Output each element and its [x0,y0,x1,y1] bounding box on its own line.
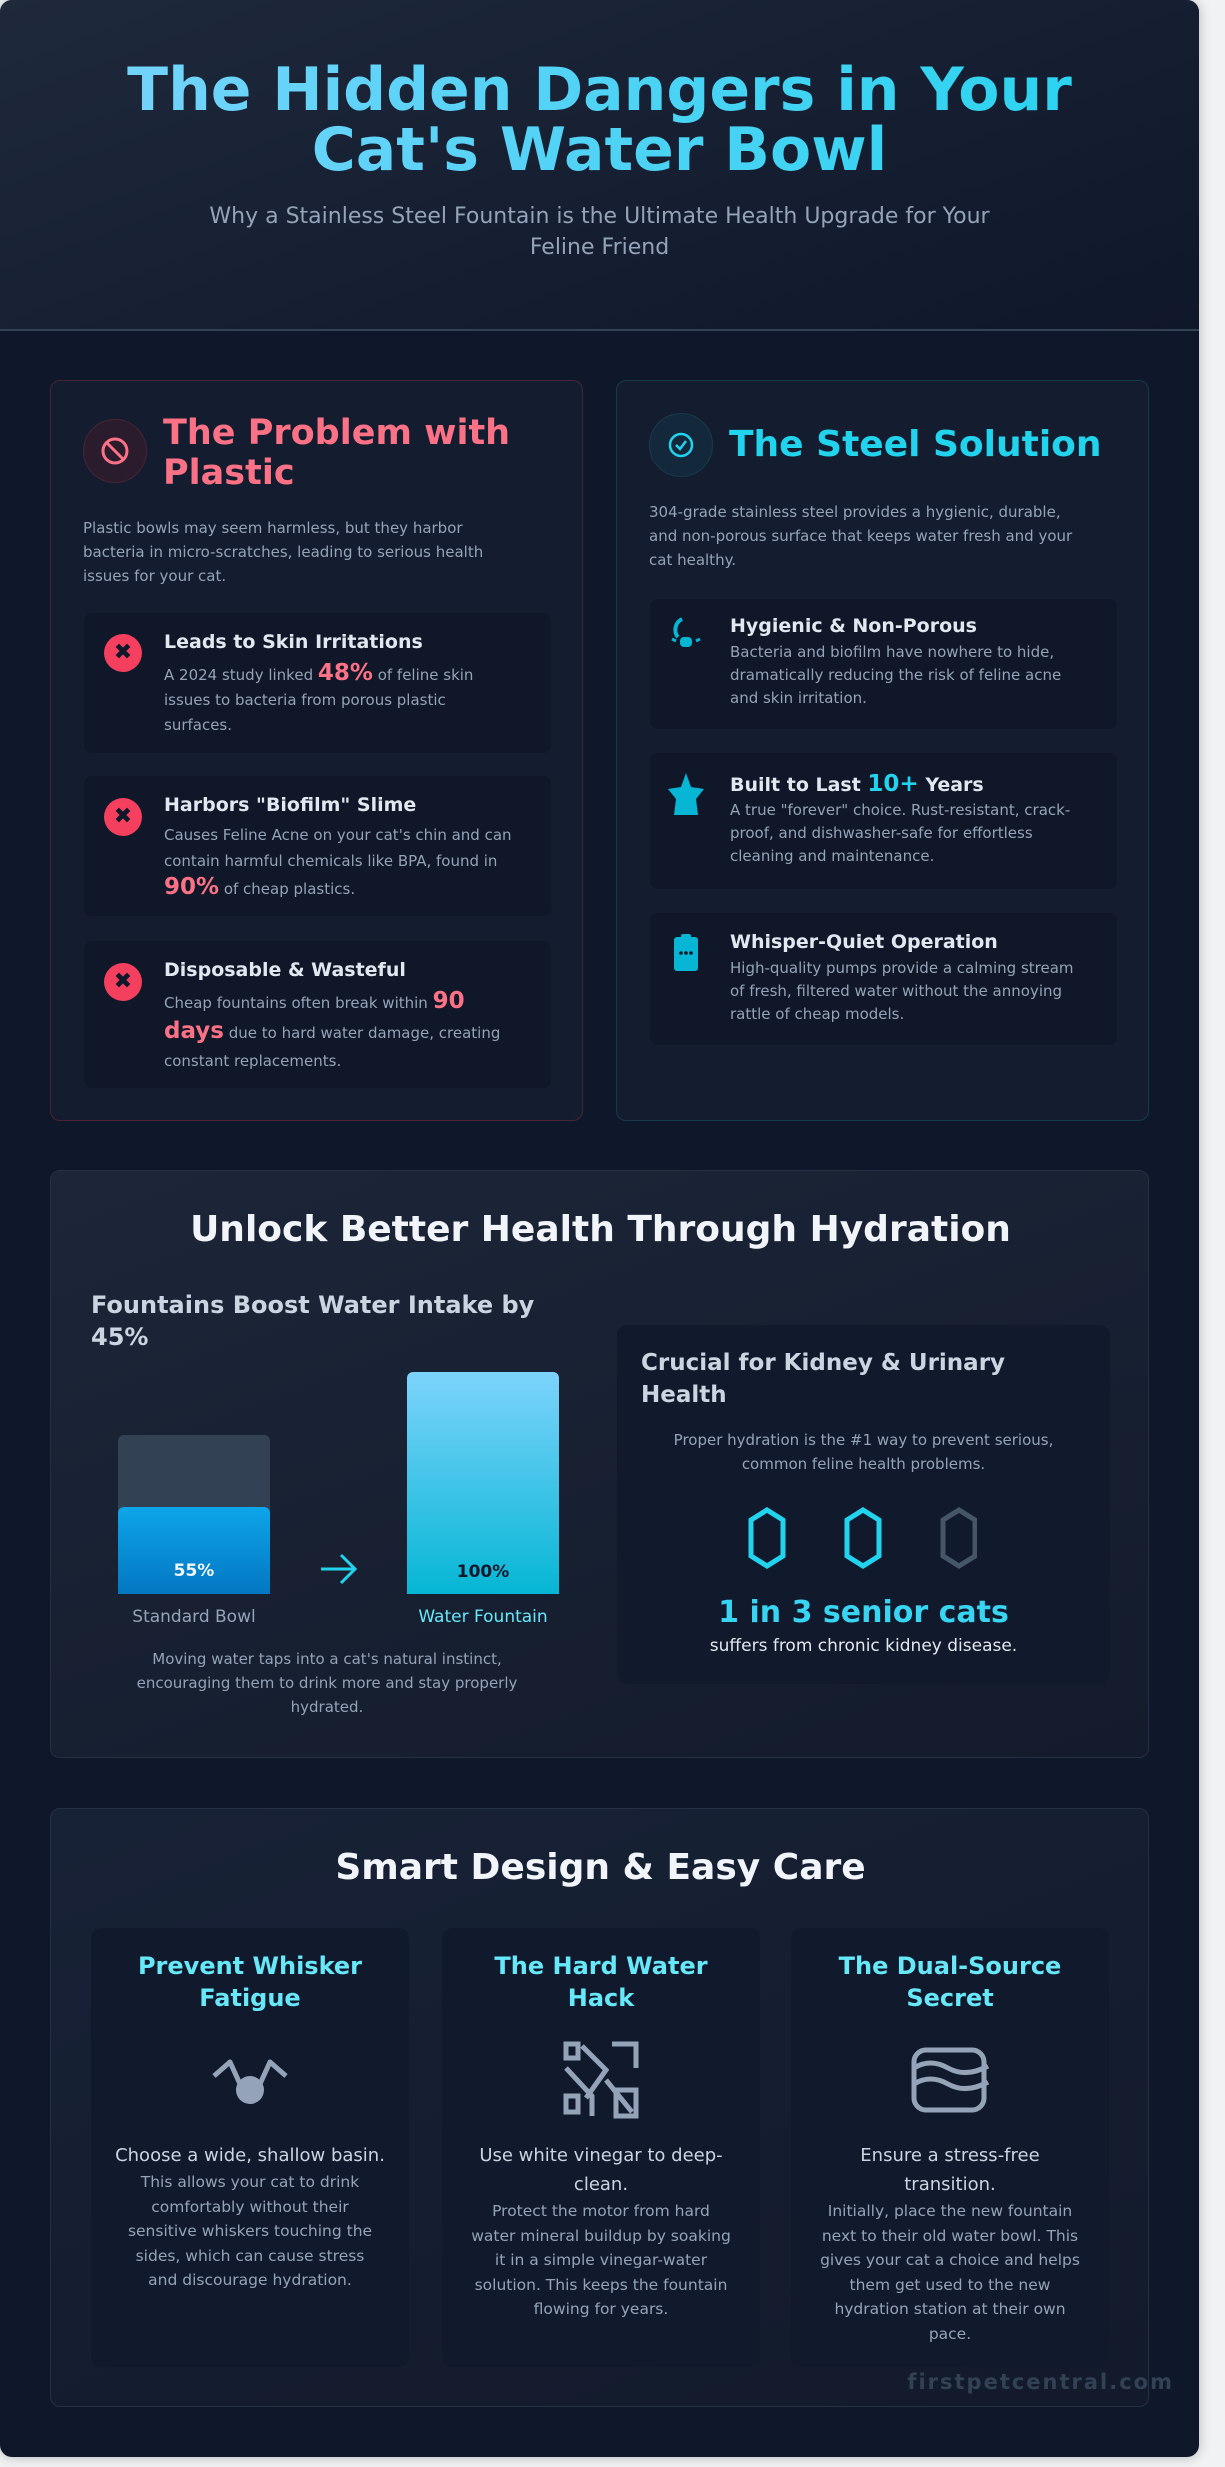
title: The Hidden Dangers in Your [127,55,1072,125]
item: built to last: Built to Last 10+ Years [730,771,984,797]
chart caption: Moving water taps into a cat's natural instinct, encouraging them to drink more and stay properly hydrated. [137,1650,517,1716]
panel: hydration [50,1170,1149,1758]
item: built to last [650,753,1117,889]
callout: kidney health: Crucial for Kidney & Urinary Health [641,1350,1005,1408]
bar chart [118,1372,559,1627]
card: dual source: The Dual-Source Secret [839,1952,1061,2012]
item: skin irritations [84,613,551,753]
bar chart: 100% [457,1562,509,1582]
item: hygienic: Hygienic & Non-Porous [730,615,977,637]
heading: The Steel Solution [729,424,1102,465]
header [0,0,1199,331]
subtitle: Why a Stainless Steel Fountain is the Ultimate Health Upgrade for Your Feline Friend [209,204,990,260]
intro text: 304-grade stainless steel provides a hygienic, durable, and non-porous surface that keeps water fresh and your cat healthy. [649,503,1072,569]
card: hard water hack: it in a simple vinegar-water [495,2251,707,2269]
title [0,60,1199,180]
callout: kidney health: suffers from chronic kidney disease. [710,1636,1017,1656]
item: disposable: Cheap fountains often break within 90 days due to hard water damage, creating constant replacements. [164,988,500,1070]
heading: Smart Design & Easy Care [335,1847,866,1888]
panel: smart design [50,1808,1149,2407]
item: skin irritations: A 2024 study linked 48% of feline skin issues to bacteria from porous plastic surfaces. [164,660,473,734]
card: dual source: Initially, place the new fountain next to their old water bowl. This gives your cat a choice and helps them get used to the new hydration station at their own pace. [820,2202,1080,2342]
item: built to last: A true "forever" choice. Rust-resistant, crack-proof, and dishwasher-safe for effortless cleaning and maintenance. [730,801,1070,865]
card: hard water hack: water mineral buildup by soaking [471,2226,731,2244]
callout: kidney health: Proper hydration is the #1 way to prevent serious, common feline health problems. [674,1431,1053,1473]
bar chart: Water Fountain [418,1607,548,1627]
card: dual source: transition. [904,2174,996,2195]
card: hard water hack: Protect the motor from hard [492,2202,710,2220]
item: hygienic: Bacteria and biofilm have nowhere to hide, dramatically reducing the risk of feline acne and skin irritation. [730,643,1061,707]
heading: Plastic [163,453,295,493]
footer: site name: firstpetcentral.com [907,2370,1174,2394]
icon: check [649,413,713,477]
item: skin irritations: ✖ [114,640,132,665]
title: Cat's Water Bowl [312,115,887,185]
item: biofilm [84,776,551,916]
callout: kidney health: 1 in 3 senior cats [718,1595,1009,1630]
card: whisker fatigue: Prevent Whisker Fatigue [138,1952,362,2012]
card: whisker fatigue: Choose a wide, shallow basin. [115,2145,385,2166]
item: disposable: ✖ [114,969,132,994]
card: dual source [791,1928,1109,2367]
icon: ban [83,419,147,483]
item: disposable [84,941,551,1088]
bar chart: 55% [174,1561,214,1581]
panel: problem with plastic [50,380,583,1121]
heading: Unlock Better Health Through Hydration [190,1209,1011,1250]
subheading: Fountains Boost Water Intake by 45% [91,1291,534,1351]
item: biofilm: Harbors "Biofilm" Slime [164,794,416,816]
card: hard water hack: The Hard Water Hack [494,1952,708,2012]
card: hard water hack [442,1928,760,2367]
item: biofilm: ✖ [114,804,132,829]
item: quiet: Whisper-Quiet Operation [730,931,998,953]
item: hygienic [650,599,1117,729]
item: skin irritations: Leads to Skin Irritations [164,631,423,653]
card: hard water hack: solution. This keeps the fountain [475,2276,727,2294]
bar chart: Standard Bowl [132,1607,256,1627]
item: quiet: High-quality pumps provide a calming stream of fresh, filtered water without the annoying rattle of cheap models. [730,959,1074,1023]
card: whisker fatigue: This allows your cat to drink comfortably without their sensitive whiskers touching the sides, which can cause stress and discourage hydration. [128,2173,372,2289]
item: quiet [650,913,1117,1045]
item: disposable: Disposable & Wasteful [164,959,406,981]
card: hard water hack: flowing for years. [534,2300,668,2318]
item: biofilm: Causes Feline Acne on your cat's chin and can contain harmful chemicals like BPA, found in 90% of cheap plastics. [164,826,512,900]
icons: kidney hexagons [748,1507,977,1569]
heading: The Problem with [163,413,510,453]
intro text: Plastic bowls may seem harmless, but they harbor bacteria in micro-scratches, leading to serious health issues for your cat. [83,519,483,585]
card: whisker fatigue [91,1928,409,2367]
callout: kidney health [617,1325,1110,1684]
card: dual source: Ensure a stress-free [860,2145,1040,2166]
panel: steel solution [616,380,1149,1121]
heading [163,413,510,493]
card: hard water hack: Use white vinegar to deep-clean. [479,2145,723,2195]
